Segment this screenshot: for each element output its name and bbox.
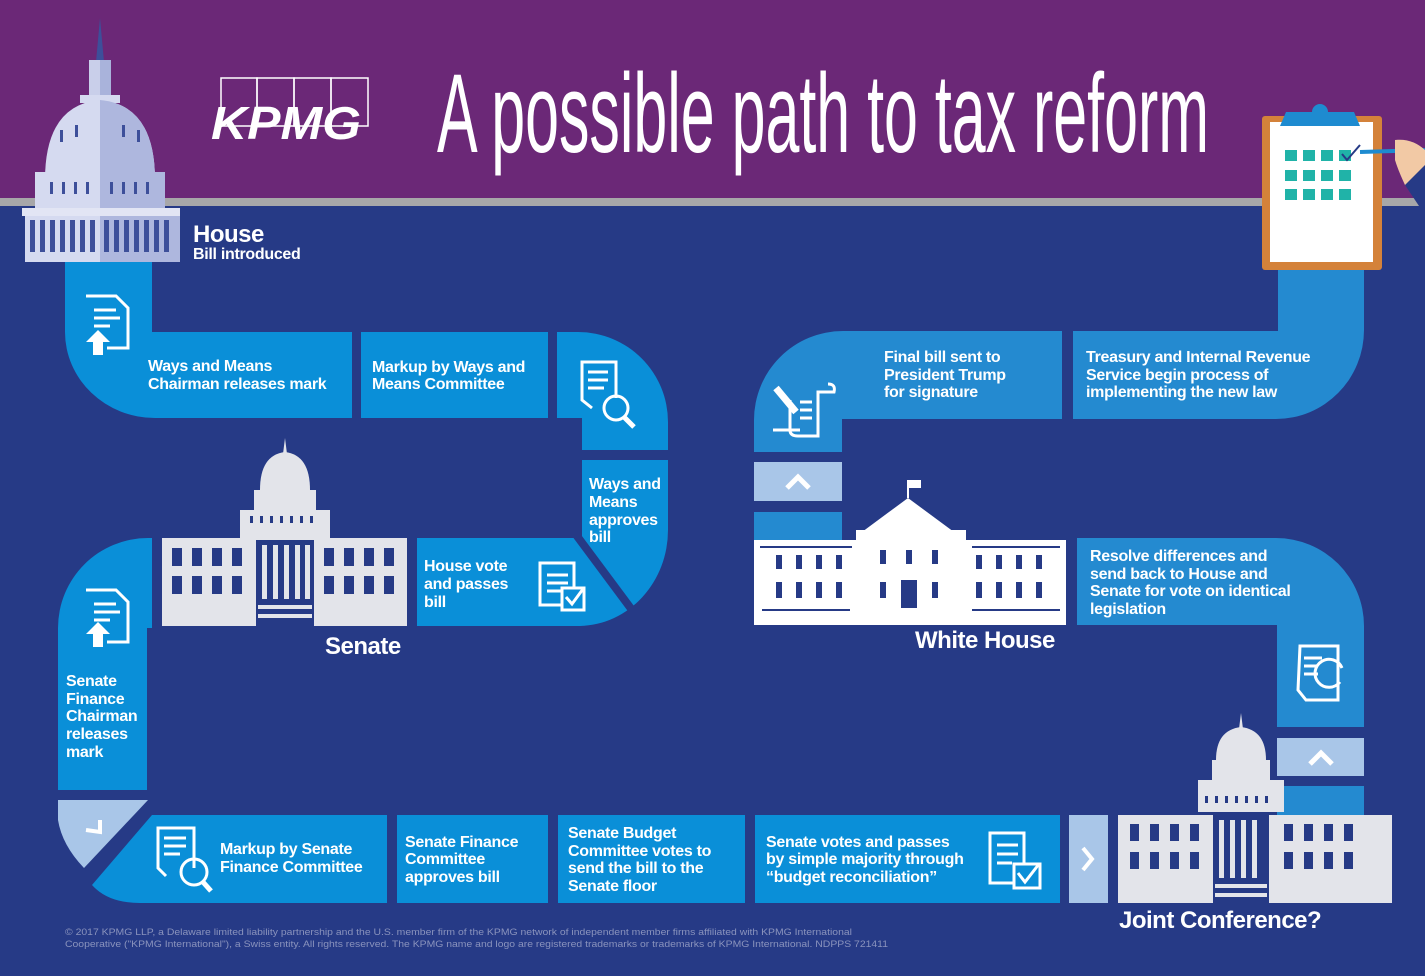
step: Senate Budget Committee: Senate floor [568,878,657,895]
step: Markup by Ways and Means Committee: Means Committee [372,376,505,393]
arrow: right [1069,815,1108,903]
step: Ways and Means approves bill + House vote: House vote [424,558,508,575]
step: Resolve differences: Resolve differences and [1090,548,1267,565]
arrow: up (right column) [1277,738,1364,776]
step: Ways and Means approves bill + House vote: Ways and [589,476,661,493]
step: Senate Finance Committee approves bill: Committee [405,851,485,868]
step: Resolve differences [1077,538,1364,727]
step: Senate Finance Chairman releases mark: releases [66,726,128,743]
step: Ways and Means approves bill + House vote: approves [589,512,658,529]
icon: clipboard checklist [1262,104,1425,270]
step: Ways and Means Chairman releases mark: Ways and Means [148,358,273,375]
step: Senate Budget Committee: Senate Budget [568,825,677,842]
step: Senate votes and passes: Senate votes and passes [766,834,950,851]
step: Treasury and IRS: Service begin process of [1086,367,1269,384]
footer copyright: © 2017 KPMG LLP, a Delaware limited liability partnership and the U.S. member firm of the KPMG network of independent member firms affiliated with KPMG International [65,927,852,938]
arrow: up (white house) [754,462,842,501]
step: Senate Finance Committee approves bill: approves bill [405,869,500,886]
House label: Bill introduced [193,246,301,263]
step: Final bill sent to President: for signature [884,384,978,401]
step: Senate votes and passes: by simple majority through [766,851,964,868]
arrow: down-right turn [58,800,148,868]
White House label: White House [915,627,1055,654]
KPMG logo: KPMG [211,97,361,149]
step: Senate votes and passes [755,815,1060,903]
step: Final bill sent to President [754,331,1062,452]
step: Markup by Ways and Means Committee: Markup by Ways and [372,359,525,376]
step: Markup by Senate Finance Committee [92,815,387,903]
step: Senate Finance Chairman releases mark: mark [66,744,103,761]
step: Senate Finance Chairman releases mark: Finance [66,691,125,708]
step: Ways and Means approves bill + House vote: bill [589,529,611,546]
House label: House [193,221,264,248]
step: Resolve differences: Senate for vote on identical [1090,583,1291,600]
step: Senate votes and passes: “budget reconciliation” [766,869,937,886]
step: Senate Finance Committee approves bill [397,815,548,903]
Joint Conference label: Joint Conference? [1119,907,1321,934]
step: Senate Finance Committee approves bill: Senate Finance [405,834,519,851]
step: Senate Finance Chairman releases mark [58,538,152,790]
step: Senate Finance Chairman releases mark: Senate [66,673,117,690]
step: review icon corner [557,332,668,450]
step: Resolve differences: legislation [1090,601,1166,618]
step: Markup by Senate Finance Committee: Markup by Senate [220,841,353,858]
step: Ways and Means Chairman releases mark: Chairman releases mark [148,376,327,393]
icon: White House [754,480,1066,625]
footer copyright [65,927,888,950]
step: Treasury and IRS [1073,270,1364,419]
footer copyright: Cooperative ("KPMG International"), a Swiss entity. All rights reserved. The KPMG name and logo are registered trademarks or trademarks of KPMG International. NDPPS 721411 [65,939,888,950]
step: Ways and Means approves bill + House vote: Means [589,494,638,511]
step: Ways and Means approves bill + House vote: and passes [424,576,509,593]
icon: Joint Conference capitol [1118,713,1392,903]
step: Ways and Means approves bill + House vote [417,460,668,626]
step: Markup by Senate Finance Committee: Finance Committee [220,859,363,876]
step: Ways and Means approves bill + House vote: bill [424,594,446,611]
icon: capitol dome (House) [22,18,180,262]
House label [193,221,301,263]
step: Treasury and IRS: Treasury and Internal Revenue [1086,349,1311,366]
icon: Senate building [162,438,407,626]
step: Senate Budget Committee: send the bill to the [568,860,704,877]
step: Final bill sent to President: President Trump [884,367,1006,384]
Senate label: Senate [325,633,401,660]
step: Final bill sent to President: Final bill sent to [884,349,1001,366]
step: Resolve differences: send back to House and [1090,566,1267,583]
step: Treasury and IRS: implementing the new law [1086,384,1278,401]
step: Markup by Ways and Means Committee [361,332,548,418]
step: Senate Finance Chairman releases mark: Chairman [66,708,137,725]
KPMG logo [211,78,368,149]
step: Senate Budget Committee [558,815,745,903]
step: Senate Budget Committee: Committee votes to [568,843,712,860]
step: Ways and Means Chairman releases mark [65,262,352,418]
